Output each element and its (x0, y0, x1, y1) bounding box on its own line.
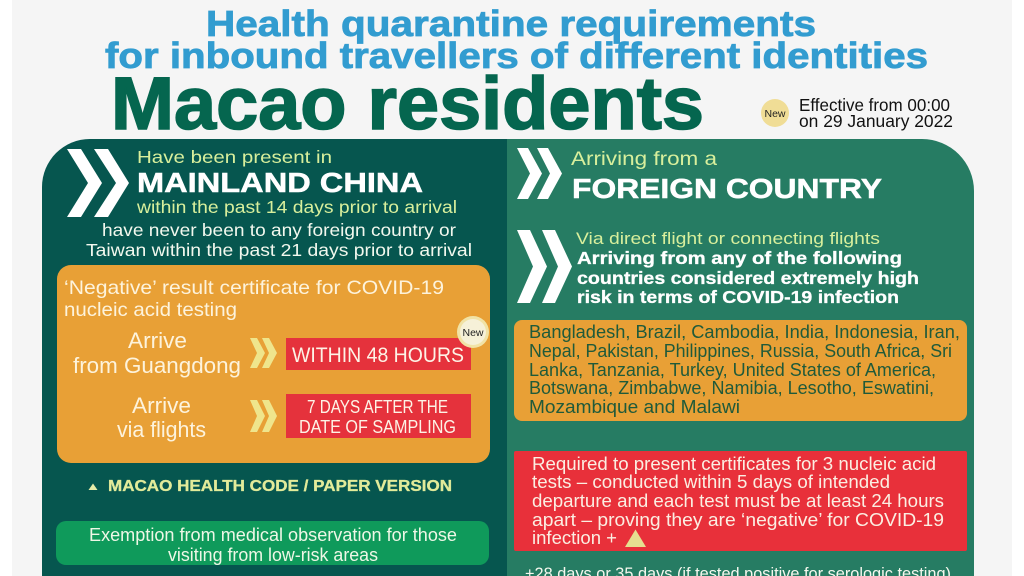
red requirement box: tests – conducted within 5 days of intended (532, 472, 890, 492)
mainland condition text: Taiwan within the past 21 days prior to arrival (86, 240, 472, 260)
icon: double chevron foreign (517, 148, 562, 199)
heading: Macao residents: Macao residents (111, 62, 704, 145)
arrive via flights (117, 393, 206, 442)
panel: negative certificate (57, 265, 490, 463)
arrive from Guangdong: Arrive (128, 328, 187, 353)
icon: chevrons flights (250, 400, 277, 432)
red requirement box: Required to present certificates for 3 nucleic acid (532, 454, 936, 474)
certificate text (64, 277, 444, 321)
7 days after sampling: DATE OF SAMPLING (299, 417, 456, 437)
panel: mainland China (42, 139, 507, 576)
effective date note (761, 95, 953, 131)
arrive via flights: via flights (117, 417, 206, 442)
effective date note: on 29 January 2022 (799, 111, 953, 131)
foreign heading: FOREIGN COUNTRY (572, 173, 882, 204)
flight heading: Via direct flight or connecting flights (576, 229, 880, 248)
arrive from Guangdong (73, 328, 241, 378)
icon: triangle (625, 530, 646, 547)
mainland condition text (86, 220, 472, 260)
icon: double chevron mainland (67, 149, 129, 217)
title (105, 3, 928, 76)
mainland heading (136, 147, 457, 217)
flight heading: risk in terms of COVID-19 infection (577, 287, 899, 307)
panel: foreign country (507, 139, 974, 576)
exemption box: visiting from low-risk areas (168, 545, 378, 565)
mainland heading: MAINLAND CHINA (137, 167, 423, 198)
within 48 hours (286, 338, 471, 370)
effective date note: New (764, 108, 786, 120)
red requirement box: apart – proving they are ‘negative’ for COVID-19 (532, 510, 944, 530)
mainland condition text: have never been to any foreign country or (102, 220, 456, 240)
title: for inbound travellers of different identities (105, 35, 928, 76)
7 days after sampling: 7 DAYS AFTER THE (307, 397, 448, 417)
country list: Nepal, Pakistan, Philippines, Russia, South Africa, Sri (529, 341, 952, 361)
country list (514, 320, 967, 421)
foreign heading: Arriving from a (571, 149, 718, 170)
within 48 hours: WITHIN 48 HOURS (292, 344, 464, 367)
7 days after sampling (286, 394, 471, 438)
flight heading: countries considered extremely high (577, 268, 919, 288)
certificate text: ‘Negative’ result certificate for COVID-19 (64, 277, 444, 299)
flight heading: Arriving from any of the following (577, 248, 902, 268)
icon: double chevron flights (517, 230, 572, 303)
new badge: New (462, 327, 484, 339)
certificate text: nucleic acid testing (64, 299, 237, 321)
macao health code: MACAO HEALTH CODE / PAPER VERSION (108, 478, 452, 495)
effective date note: Effective from 00:00 (799, 95, 950, 115)
red requirement box: departure and each test must be at least 24 hours (532, 491, 944, 511)
title: Health quarantine requirements (206, 3, 816, 44)
exemption box: Exemption from medical observation for those (89, 525, 457, 545)
arrive via flights: Arrive (132, 393, 191, 418)
arrive from Guangdong: from Guangdong (73, 353, 241, 378)
foreign heading (571, 149, 882, 204)
mainland heading: within the past 14 days prior to arrival (136, 197, 457, 217)
country list: Bangladesh, Brazil, Cambodia, India, Indonesia, Iran, (529, 322, 960, 342)
flight heading (576, 229, 919, 307)
red requirement box (514, 451, 967, 551)
exemption box (56, 521, 489, 565)
country list: Botswana, Zimbabwe, Namibia, Lesotho, Eswatini, (529, 378, 934, 398)
mainland heading: Have been present in (137, 147, 332, 167)
icon: chevrons Guangdong (250, 338, 277, 368)
red requirement box: infection + (532, 528, 617, 548)
country list: Mozambique and Malawi (529, 397, 740, 417)
new badge (457, 316, 489, 348)
country list: Lanka, Tanzania, Turkey, United States of America, (529, 360, 936, 380)
